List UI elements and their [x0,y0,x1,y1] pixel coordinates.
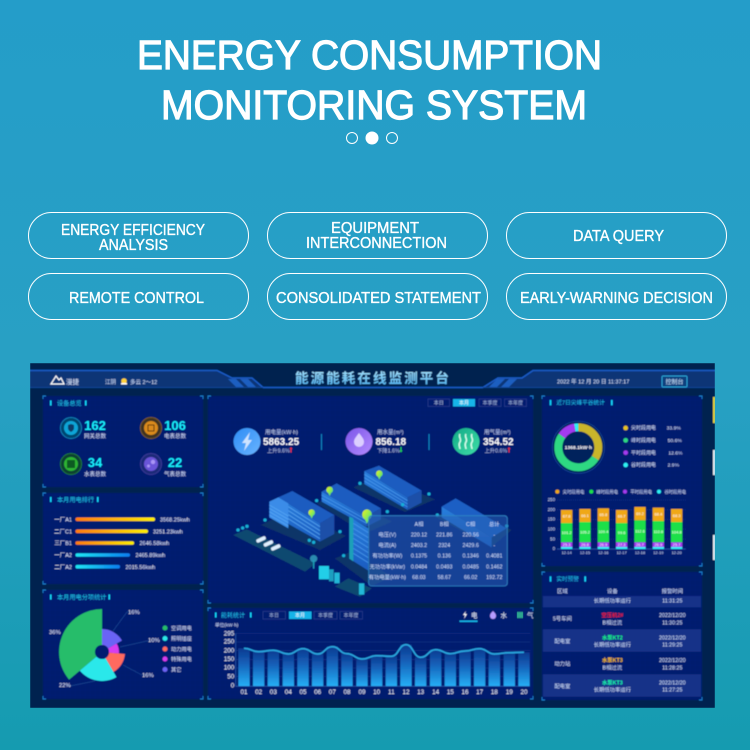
energy type tabs [460,610,534,622]
data table overlay: 电压(V) [378,530,396,538]
stacked bar chart: 12-15 [580,550,591,555]
data table overlay: 221.86 [436,532,452,538]
data table overlay: 0.1462 [486,564,502,570]
data table overlay: 有功电量(kW·h) [369,573,406,581]
data table overlay: 220.56 [462,532,479,538]
stacked bar chart: 100 [548,526,556,531]
stacked bar chart: 69.2 [636,511,645,516]
bar and line chart: 03 [270,689,277,696]
parking lot [233,529,316,572]
isometric factory [233,466,512,597]
stacked bar chart: 66.7 [618,514,626,519]
rose chart legend [162,624,192,674]
feature buttons: REMOTE CONTROL [69,290,204,307]
building far right [435,498,512,547]
stacked chart legend: 平时段用电 [630,488,653,495]
trees [236,482,508,557]
panel: seven-day peak valley statistics: 近7日尖峰平谷统计 [556,399,605,407]
stacked bar chart: 12-17 [617,550,628,555]
donut legend [623,425,683,469]
ranking labels: 二厂C1 [54,528,72,536]
stat: electricity: 5863.25 [263,437,300,448]
feature buttons: INTERCONNECTION [306,235,447,252]
stacked bar chart: 99.6 [618,530,626,535]
stacked chart legend: 尖时段用电 [563,488,585,495]
chart tabs: 本季度 [318,612,333,619]
energy type tabs: 气 [527,610,534,620]
bar and line chart: 20 [520,689,528,696]
bar and line chart: 10 [373,689,381,696]
building middle [317,483,392,586]
weather [105,378,157,386]
stat: water: 下降1.6% [377,446,400,454]
data table overlay: 2429.6 [462,543,479,549]
alert rows: 11:27:25 [662,688,683,694]
bar and line chart: 250 [224,639,235,646]
alert rows: 2022/12/20 [659,658,686,664]
data table overlay: 0.0485 [462,564,479,570]
bar and line chart: 单位(kW·h) [215,622,239,629]
building top [353,466,435,512]
stacked bar chart: 200 [548,507,556,512]
rose chart: 16% [128,610,140,616]
data table overlay: - [493,532,495,538]
rose chart legend: 空调用电 [171,624,192,632]
stat: 22 gas meters [164,455,186,478]
ranking labels [54,516,190,571]
rose chart legend: 照明插座 [171,634,192,642]
panel: central overview [208,396,533,603]
alert rows: 11:29:25 [662,643,683,649]
data table overlay: C相 [466,520,475,528]
stat: 162 gateways [84,418,106,440]
stat: 34 water meters [84,455,106,478]
stacked bar chart: 67.8 [563,514,571,519]
data table overlay: 0.1375 [411,554,427,560]
stat: 106 electric meters: 106 [164,418,186,433]
alert table header [557,587,683,595]
date and time: 2022 年 12 月 20 日 11:37:17 [557,378,629,386]
bar and line chart: 100 [224,665,235,672]
data table overlay: 66.02 [464,575,477,581]
rose chart legend: 特殊用电 [171,655,192,663]
bar and line chart: 14 [432,689,440,696]
stacked bar chart: 112.6 [635,529,646,534]
console button [662,376,687,387]
bar and line chart: 200 [224,647,235,654]
panel: seven-day peak valley statistics [542,396,702,566]
data table overlay: 0.1346 [462,554,479,560]
panel: monthly electricity ranking: 本月用电排行 [57,496,94,504]
alert table header: 报警时间 [662,587,683,595]
donut legend: 尖时段用电 [631,425,656,432]
bar and line chart: 0 [231,682,235,689]
stacked bar chart: 25.7 [673,542,681,547]
alert rows: 长期低功率运行 [594,641,632,649]
stat: 162 gateways: 162 [84,418,106,433]
period tabs: 本日 [434,400,444,407]
period tabs: 本季度 [482,400,498,407]
alert rows: B相过流 [603,663,623,671]
ranking labels: 2465.89kwh [136,553,165,559]
panel: equipment overview [43,396,203,487]
feature buttons: DATA QUERY [573,228,664,245]
alert rows: 配电室 [554,682,571,690]
stacked bar chart: 101.2 [562,530,572,535]
stat: 22 gas meters: 气表总数 [164,470,186,478]
ranking labels: 3568.25kwh [160,518,190,524]
bar and line chart: 19 [506,689,513,696]
stacked chart legend: 谷时段用电 [664,488,687,495]
bar and line chart: 02 [255,689,263,696]
bar and line chart: 05 [299,689,307,696]
stat: gas: 用气量(m³) [484,428,511,436]
panel: equipment overview: 设备总览 [57,400,82,408]
stat: 106 electric meters: 电表总数 [164,432,186,440]
feature buttons: EARLY-WARNING DECISION [520,290,713,307]
data table overlay: 2324 [438,543,450,549]
rose chart: 22% [59,683,71,689]
title: MONITORING SYSTEM [161,82,587,128]
stat: water: 856.18 [376,437,407,448]
bar and line chart: 08 [343,689,351,696]
console button: 控制台 [665,378,684,386]
stacked bar chart: 12-20 [672,550,683,555]
stat: gas: 354.52 [483,437,514,448]
energy type tabs: 电 [471,610,478,620]
stacked bar chart: 26.9 [654,542,663,547]
donut legend: 12.6% [668,450,683,456]
stacked bar chart: 68.4 [654,512,663,517]
alert table header: 区域 [557,587,568,595]
donut chart [552,421,604,473]
stacked bar chart: 25.3 [563,542,571,547]
feature buttons: ENERGY EFFICIENCY [61,222,205,239]
alert table header: 设备 [607,587,618,595]
bar and line chart: 18 [491,689,498,696]
stacked bar chart: 109.4 [598,529,609,534]
data table overlay: 总计 [489,520,500,528]
ranking labels: 一厂A1 [54,516,72,524]
ranking labels: 二厂A2 [54,564,72,571]
donut legend: 峰时段用电 [631,437,656,444]
alert rows: 11:30:25 [662,620,683,626]
stat: 34 water meters: 34 [88,455,103,470]
ranking labels: 三厂B1 [54,540,72,547]
alert rows: 水泵KT3 [602,656,623,664]
data table overlay: 电流(A) [378,541,396,549]
stacked bar chart: 27.3 [618,542,626,547]
panel: consumption statistics: 能耗统计 [221,612,245,620]
alert rows: 配电室 [554,637,571,645]
icon: water meter [60,454,82,474]
data table overlay: 无功功率(kVar) [370,562,405,570]
stacked bar chart: 26.8 [581,542,590,547]
bar and line chart: 04 [285,689,292,696]
stacked bar chart: 12-16 [598,550,609,555]
weather: 江阴 [105,378,117,386]
data table overlay: 有功功率(W) [372,552,402,560]
logo [51,376,80,386]
panel: monthly electricity by category [43,590,203,699]
stat: 162 gateways: 网关总数 [84,432,106,440]
alert rows: 长期低功率运行 [594,686,632,694]
title [137,32,602,128]
chart tabs: 本日 [269,612,279,619]
rose chart [49,609,160,689]
panel: monthly electricity by category: 本月用电分项统计 [57,594,106,602]
alert rows: 11:28:25 [662,665,683,671]
location pins [308,470,383,524]
stacked bar chart: 150 [548,517,556,522]
feature buttons: ANALYSIS [99,237,168,254]
alert rows: 5号车间 [553,615,572,623]
stacked bar chart: 110.8 [653,529,664,534]
dashboard screenshot [30,363,715,708]
donut legend: 2.9% [668,463,680,469]
ranking labels: 2015.56kwh [126,565,155,571]
bar and line chart: 16 [461,689,469,696]
alert rows: 动力站 [554,660,571,668]
donut legend: 谷时段用电 [631,462,656,469]
stat: gas [452,428,514,455]
alert rows: 2022/12/20 [659,613,686,619]
panel: real-time alerts [542,572,702,700]
stat: 34 water meters: 水表总数 [84,470,106,478]
bar and line chart: 50 [227,673,235,680]
bar and line chart: 06 [314,689,322,696]
ranking labels: 2646.58kwh [140,541,169,547]
alert rows: 空压机2# [601,611,623,619]
rose chart legend: 动力用电 [171,645,192,653]
stacked bar chart: 12-14 [562,550,573,555]
data table overlay [369,516,507,586]
stacked bar chart: 250 [548,497,556,502]
stacked bar chart: 105.2 [580,529,591,534]
data table overlay: 0.0493 [436,564,452,570]
feature buttons: EQUIPMENT [331,220,419,237]
stat: 106 electric meters [164,418,186,440]
stacked bar chart: 68.3 [673,513,681,518]
bar and line chart: 01 [240,689,248,696]
bar and line chart: 13 [417,689,425,696]
stacked bar chart: 50 [550,536,556,541]
stacked bar chart: 12-19 [653,550,664,555]
donut legend: 平时段用电 [631,449,656,456]
stat: 22 gas meters: 22 [168,455,182,470]
feature buttons: CONSOLIDATED STATEMENT [276,290,482,307]
data table overlay: 0.0484 [411,564,427,570]
stat: gas: 上升0.6% [484,446,507,454]
stacked bar chart [548,497,686,555]
donut legend: 50.6% [668,438,682,444]
period tabs: 本月 [459,400,469,407]
bar and line chart: 17 [476,689,484,696]
chart tabs: 本月 [295,612,305,619]
panel: monthly electricity ranking [43,493,203,584]
logo: 漫捷 [66,377,80,386]
dashboard header [30,370,715,388]
equipment [310,555,372,597]
icon: electric meter [140,418,162,438]
data table overlay: - [493,543,495,549]
rose chart: 16% [142,673,154,679]
pagination dots [346,132,398,144]
right edge strips [713,397,715,560]
period tabs [428,399,526,407]
data table overlay: 220.12 [411,532,427,538]
stat: water [346,428,407,455]
data table overlay: 58.67 [438,575,451,581]
data table overlay: 68.03 [412,575,426,581]
stacked bar chart: 66.1 [581,513,590,518]
icon: gas meter [140,454,162,474]
bar and line chart [215,622,530,696]
stacked chart legend: 峰时段用电 [596,488,619,495]
alert rows: 水泵KT3 [602,678,623,686]
period tabs: 本年度 [508,400,523,407]
bar and line chart: 15 [447,689,454,696]
stat: water: 用水量(m³) [377,428,404,436]
rose chart: 10% [148,638,160,644]
bar and line chart: 07 [329,689,336,696]
title: ENERGY CONSUMPTION [137,32,602,78]
bar and line chart: 150 [224,656,235,663]
alert rows: 2022/12/20 [659,635,686,641]
stacked chart legend [555,488,687,495]
stat: electricity [234,428,300,455]
bar and line chart: 11 [388,689,395,696]
ranking labels: 3251.23kwh [153,530,183,536]
stacked bar chart: 65.8 [599,512,608,517]
weather: 多云 2～12 [130,378,157,386]
data table overlay: B相 [440,520,449,528]
stacked bar chart: 104.8 [672,529,682,534]
donut legend: 33.9% [667,426,681,432]
stat: electricity: 上升9.6% [267,446,290,454]
data table overlay: 0.4081 [486,554,502,560]
ranking bars [76,518,155,568]
stat: electricity: 用电量(kW·h) [265,428,298,436]
panel: consumption statistics [208,608,534,699]
stacked bar chart: 26.7 [636,542,645,547]
donut chart: 1368.1kW·h [565,445,592,451]
energy type tabs: 水 [500,610,508,620]
data table overlay: 2403.2 [411,543,427,549]
ranking labels: 一厂A2 [54,552,72,559]
panel: real-time alerts: 实时预警 [556,575,579,583]
alert rows: 2022/12/20 [659,680,686,686]
stacked bar chart: 0 [553,546,556,551]
stacked bar chart: 12-18 [635,550,646,555]
alert rows: 长期低功率运行 [594,596,632,604]
alert rows: 11:31:25 [662,598,683,604]
data table overlay: A相 [415,520,423,528]
bar and line chart: 09 [358,689,366,696]
building left [261,491,346,550]
icon: gateway [60,418,82,438]
platform title: 能源能耗在线监测平台 [295,370,451,386]
data table overlay: 192.72 [486,575,502,581]
alert rows [543,596,701,697]
rose chart legend: 其它 [171,666,181,674]
bar and line chart: 295 [224,630,235,637]
feature buttons [28,212,726,320]
rose chart: 36% [49,630,61,636]
stacked bar chart: 26.9 [599,542,608,547]
alert rows: 水泵KT2 [602,633,623,641]
data table overlay: 0.136 [438,554,451,560]
chart tabs [263,612,362,619]
bar and line chart: 12 [402,689,410,696]
chart tabs: 本年度 [343,612,359,619]
alert rows: B相过流 [603,618,623,626]
